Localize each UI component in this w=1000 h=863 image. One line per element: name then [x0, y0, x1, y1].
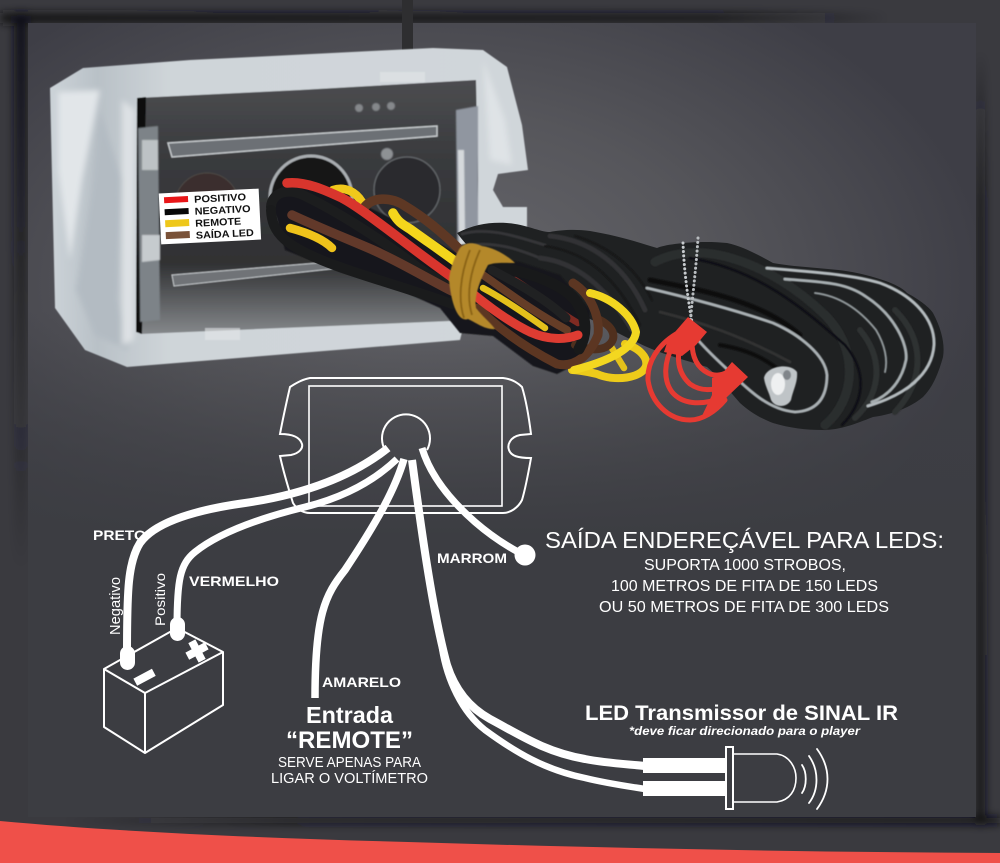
rear yellow [333, 189, 362, 202]
black strands [493, 266, 585, 349]
module outline [280, 378, 531, 513]
long brown strand [478, 283, 598, 365]
red exit [456, 280, 578, 338]
inner ribs [138, 106, 478, 322]
ball chains [683, 238, 698, 325]
LED output text: 100 METROS DE FITA DE 150 LEDS [611, 578, 878, 595]
small clear LED [764, 366, 797, 406]
legend labels: POSITIVO [194, 192, 247, 206]
legend swatches [164, 196, 190, 239]
IR LED title: LED Transmissor de SINAL IR [585, 702, 898, 725]
loops after rubber band [456, 266, 646, 378]
wire labels: VERMELHO [189, 573, 279, 589]
lower brown wire [292, 215, 452, 291]
dark wire bundle base [272, 182, 590, 374]
inner cavity [137, 80, 478, 334]
wire labels: Positivo [152, 573, 168, 626]
rubber band [449, 243, 515, 329]
shell shading [58, 60, 512, 350]
dark red strand [515, 280, 578, 323]
centre hole [270, 156, 352, 238]
remote input text: LIGAR O VOLTÍMETRO [271, 770, 428, 787]
upper slot [168, 126, 437, 157]
remote input text: SERVE APENAS PARA [278, 754, 421, 771]
remote input text: “REMOTE” [286, 727, 413, 754]
rear yellow lower [290, 228, 332, 248]
wire labels: AMARELO [322, 674, 401, 690]
top yellow wire [393, 213, 456, 262]
IR LED title: *deve ficar direcionado para o player [629, 726, 861, 738]
brown rear strand [575, 320, 613, 349]
negative terminal [120, 646, 135, 670]
wire colour legend [159, 189, 261, 244]
side circles [374, 157, 440, 223]
wiring diagram [104, 378, 828, 809]
wire labels: MARROM [437, 550, 507, 566]
rear yellow middle [345, 218, 395, 250]
red pendant logo [648, 317, 748, 420]
IR LED wire upper [412, 460, 645, 766]
LED output text [545, 527, 944, 616]
yellow rear loop [572, 344, 646, 378]
coil of black cable [457, 223, 944, 430]
legend labels: REMOTE [195, 216, 242, 230]
yellow inner strand [483, 288, 624, 368]
remote input text [271, 702, 428, 787]
bottom clip [205, 328, 240, 340]
grey stripe cables [767, 268, 934, 406]
wire labels [93, 527, 507, 690]
legend labels: NEGATIVO [194, 204, 251, 218]
leds glow [355, 102, 395, 160]
LED output text: SUPORTA 1000 STROBOS, [644, 557, 846, 574]
clear housing [50, 48, 528, 367]
second black strand [492, 270, 566, 318]
plus sign [182, 636, 212, 666]
yellow wire: remote [315, 459, 404, 698]
remote input text: Entrada [306, 702, 393, 728]
red bottom band [0, 821, 1000, 863]
upper black wire [271, 192, 452, 285]
lower slot [172, 262, 340, 286]
black wire: negative [127, 448, 388, 653]
signal waves [802, 749, 828, 809]
output terminal [514, 544, 536, 566]
wire labels: Negativo [108, 577, 124, 635]
LED body [733, 754, 796, 802]
LED output text: SAÍDA ENDEREÇÁVEL PARA LEDS: [545, 527, 944, 553]
mid brown strand [483, 275, 567, 330]
lower black wire [271, 210, 452, 304]
brown wire: LED output [422, 448, 520, 553]
red wire: positive [177, 459, 397, 627]
antenna wire [402, 0, 413, 52]
wire labels: PRETO [93, 527, 146, 543]
legend labels: SAÍDA LED [196, 226, 254, 242]
top brown wire [364, 199, 460, 250]
battery [104, 617, 223, 753]
top clip [380, 72, 425, 82]
yellow main loop [574, 293, 636, 370]
LED output text: OU 50 METROS DE FITA DE 300 LEDS [599, 599, 889, 616]
coloured wires [271, 183, 460, 304]
IR LED wire lower [442, 648, 645, 789]
photo: strobe module with wires [50, 0, 944, 430]
red wire [287, 183, 456, 280]
LED legs [643, 758, 726, 796]
LED flange [726, 747, 733, 809]
IR LED title [585, 702, 898, 738]
positive terminal [170, 617, 185, 641]
legend labels [194, 192, 254, 242]
minus sign [133, 669, 156, 686]
IR LED icon [643, 747, 828, 809]
